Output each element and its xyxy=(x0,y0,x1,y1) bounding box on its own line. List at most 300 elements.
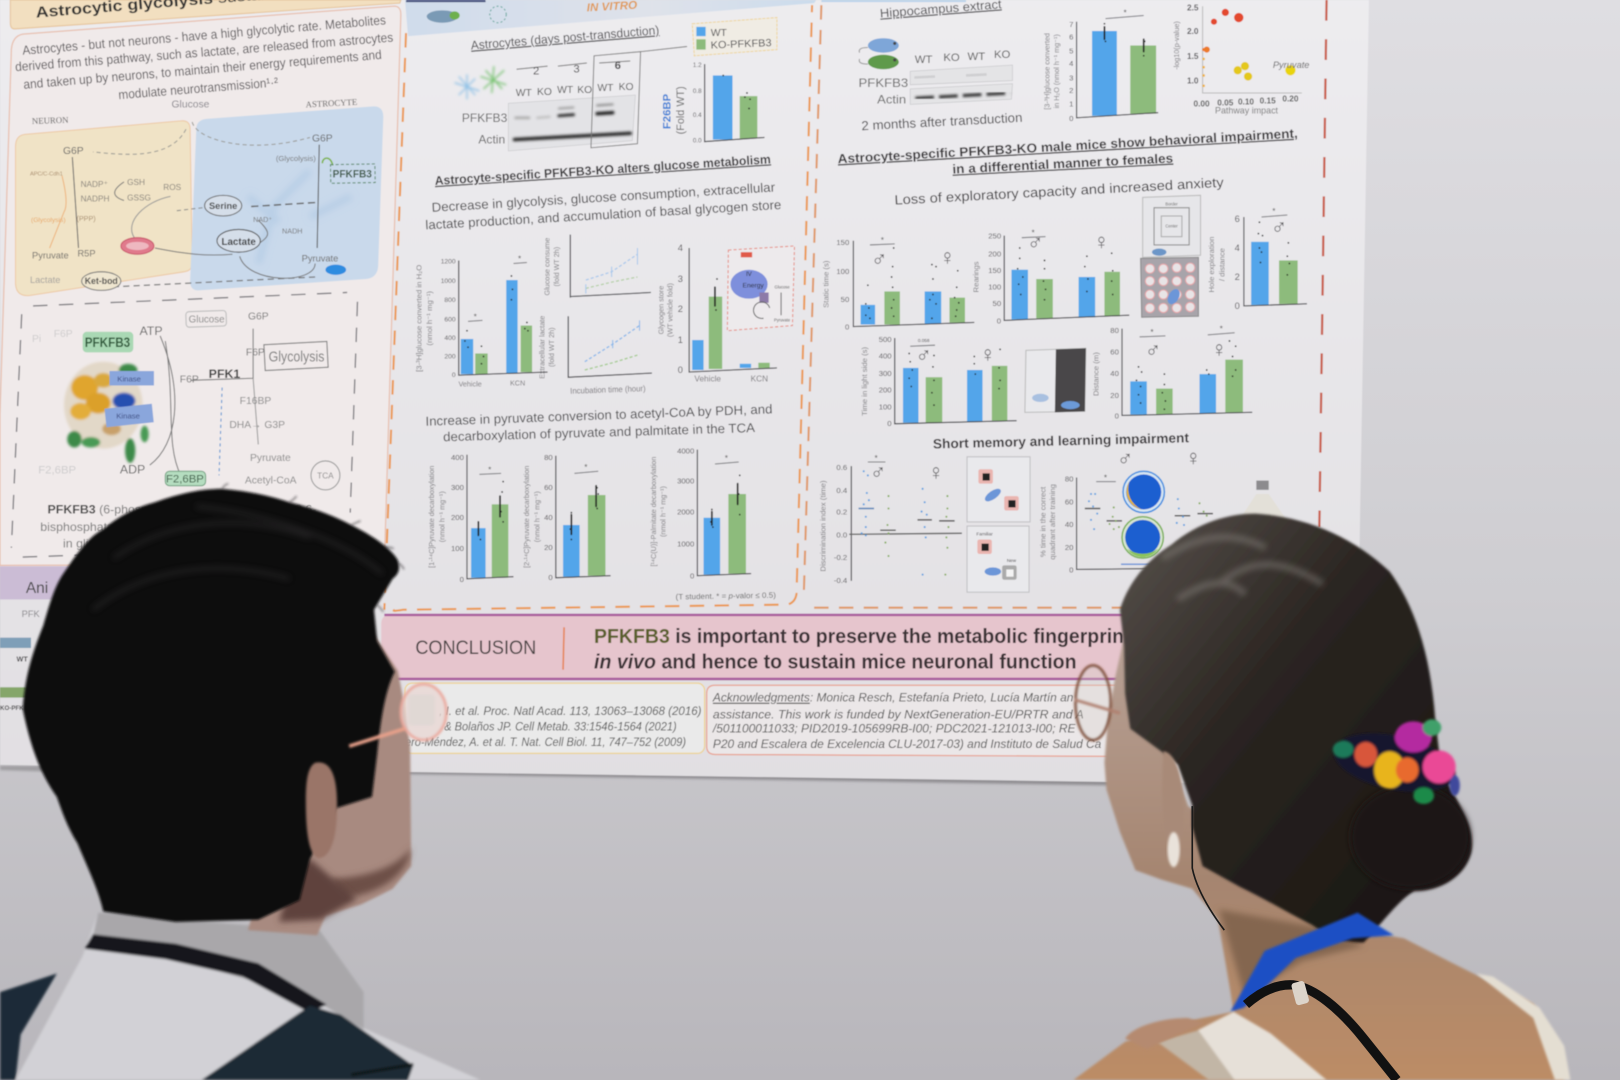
chart: glucose converted: 600 xyxy=(444,316,456,323)
chart: glucose converted: KCN xyxy=(510,378,525,387)
glycolysis pathway: DHA→ G3P xyxy=(229,420,285,431)
western blot: WT xyxy=(557,85,574,96)
references box xyxy=(405,683,705,753)
chart: glucose converted: * xyxy=(518,254,522,263)
chart: discrimination index: ♀ xyxy=(928,460,944,485)
chart: time in light side: 400 xyxy=(879,352,892,361)
chart: pathway scatter: 0.15 xyxy=(1260,96,1276,105)
chart: rearings: ♀ xyxy=(1093,229,1109,254)
acknowledgments box: /501100011033; PID2019-105699RB-I00; PDC2021-121013-I00; RE xyxy=(712,722,1077,736)
chart: hippocampal glucose: 1 xyxy=(1069,99,1073,108)
chart: discrimination index: -0.2 xyxy=(834,553,847,562)
intro text: Astrocytes - but not neurons - have a high glycolytic rate. Metabolites xyxy=(22,12,386,58)
heading band xyxy=(10,0,401,29)
glycolysis pathway: Pi xyxy=(32,334,41,345)
metabolic map: G6P xyxy=(312,134,333,145)
chart: hippocampal glucose: [3-³H]glucose converted xyxy=(1043,33,1052,110)
legend: WT xyxy=(711,28,728,39)
hand xyxy=(1125,1018,1204,1049)
chart: discrimination index: 0.2 xyxy=(836,508,847,517)
chart: glycogen store: (WT vehicle fold) xyxy=(666,283,675,337)
ear xyxy=(306,762,337,858)
chart: rearings: 250 xyxy=(988,232,1001,241)
chart: palmitate: * xyxy=(725,454,729,463)
western blot: KO xyxy=(537,87,552,98)
chart: time in quadrant: 40 xyxy=(1065,520,1073,529)
chart: rearings: 150 xyxy=(988,266,1001,275)
chart: palmitate: 3000 xyxy=(677,477,694,486)
chart: glucose converted: 800 xyxy=(444,297,456,304)
PFKFB3 caption: in glia xyxy=(63,537,95,551)
metabolic map xyxy=(30,122,338,287)
conclusion banner xyxy=(381,614,1136,679)
PFKFB3 caption: PFKFB3 (6-phosphofructo-2-kinase/fructose-2,6- xyxy=(48,503,316,517)
chart: hippocampal glucose: 4 xyxy=(1069,59,1074,68)
chart: hippocampal glucose: 5 xyxy=(1069,47,1073,56)
chart: hole exploration: 4 xyxy=(1235,243,1240,253)
chart: F26BP: 0.8 xyxy=(693,88,702,95)
chart: glycogen store: Vehicle xyxy=(694,374,721,383)
icon: mice xyxy=(859,38,899,69)
panel: animal model (left edge): WT xyxy=(17,654,28,663)
chart: 1-14C pyruvate xyxy=(427,453,513,584)
glasses xyxy=(1074,666,1120,740)
chart: static time xyxy=(822,236,974,332)
metabolic map: (Glycolysis) xyxy=(31,217,66,224)
chart: static time: ♂ xyxy=(871,247,887,272)
chart: glucose converted: 200 xyxy=(444,354,456,361)
chart: F26BP: F26BP xyxy=(662,93,674,129)
chart: hole exploration: Hole exploration xyxy=(1207,237,1216,293)
hair xyxy=(23,489,399,922)
chart: glycogen store: Glycogen store xyxy=(656,286,665,334)
subheading: exploratory capacity: Loss of exploratory capacity and increased anxiety xyxy=(894,175,1224,208)
chart: time in light side: 300 xyxy=(879,369,892,378)
chart: discrimination index: 0.4 xyxy=(836,486,848,495)
subheading: pyruvate: Increase in pyruvate conversion to acetyl-CoA by PDH, and xyxy=(425,401,773,429)
western blot: WT xyxy=(915,54,933,66)
chart: 2-14C pyruvate: 20 xyxy=(544,543,553,552)
metabolic map: NADH xyxy=(282,227,303,236)
chart: time in quadrant: quadrant after training xyxy=(1048,484,1057,560)
chart: pathway scatter: 0.10 xyxy=(1238,97,1254,106)
chart: static time: 50 xyxy=(841,295,849,304)
chart: glucose consume: (fold WT 2h) xyxy=(552,247,561,286)
chart: glucose converted: Vehicle xyxy=(458,380,482,389)
chart: time in light side: ♂ xyxy=(916,343,932,368)
chart: extracellular lactate: (fold WT 2h) xyxy=(547,327,556,367)
chart: rearings: 200 xyxy=(988,249,1001,258)
hair highlights xyxy=(93,506,382,610)
chart: distance: ♀ xyxy=(1211,337,1227,362)
chart: hole exploration: / distance xyxy=(1217,248,1226,281)
chart: time in quadrant xyxy=(1039,445,1213,575)
chart: rearings xyxy=(971,229,1129,325)
heading: behavioral impairment: Astrocyte-specific PFKFB3-KO male mice show behavioral impairment, xyxy=(837,126,1298,166)
chart: time in light side: 100 xyxy=(879,402,892,411)
chart: glucose consume xyxy=(543,235,651,298)
blue oval xyxy=(325,265,346,275)
chart: static time: 150 xyxy=(836,238,849,247)
chart: F26BP: 0.0 xyxy=(693,138,702,145)
chart: hippocampal glucose: 7 xyxy=(1069,20,1073,29)
metabolic map: ROS xyxy=(163,183,182,192)
glycolysis pathway: Pyruvate xyxy=(250,453,291,464)
heading: behavioral impairment: in a differential manner to females xyxy=(952,150,1174,177)
chart: time in quadrant: ♀ xyxy=(1185,445,1201,470)
in vitro banner: IN VITRO xyxy=(586,0,638,14)
glycolysis pathway: F6P xyxy=(180,374,199,385)
top xyxy=(1157,974,1570,1080)
chart: distance: 0 xyxy=(1115,412,1119,421)
metabolic map: R5P xyxy=(77,248,96,258)
metabolic map: NADP⁺ xyxy=(81,180,108,189)
hole board image xyxy=(1141,257,1198,317)
chart: palmitate xyxy=(649,447,751,581)
poster sheet xyxy=(0,0,1369,785)
intro text xyxy=(15,12,394,102)
protein structure: Kinase xyxy=(116,412,140,421)
chart: hole exploration: 0 xyxy=(1235,301,1240,311)
acknowledgments box xyxy=(707,685,1136,757)
glycolysis pathway: G6P xyxy=(248,311,269,322)
chart: palmitate: [¹⁴C(U)]-Palmitate decarboxylation xyxy=(649,457,658,567)
glycolysis pathway: TCA xyxy=(317,472,334,481)
western blot: KO xyxy=(619,82,634,93)
chart: time in light side: Time in light side (s) xyxy=(860,346,869,416)
western blot xyxy=(859,49,1023,133)
chart: glucose converted: 400 xyxy=(444,335,456,342)
black strap xyxy=(1246,985,1397,1080)
chart: glycogen store xyxy=(656,243,777,383)
protein structure xyxy=(64,362,154,463)
conclusion label: CONCLUSION xyxy=(415,637,536,659)
chart: time in light side: 200 xyxy=(879,386,892,395)
chart: hippocampal glucose: 0 xyxy=(1069,114,1073,123)
glycolysis pathway xyxy=(32,311,340,490)
chart: pathway scatter: Pathway impact xyxy=(1215,106,1279,116)
chart: 1-14C pyruvate: * xyxy=(488,465,492,474)
chart: 1-14C pyruvate: 400 xyxy=(451,453,464,462)
PFKFB3 caption xyxy=(40,503,316,551)
chart: discrimination index: ♂ xyxy=(870,460,886,485)
chart: 1-14C pyruvate: 200 xyxy=(451,513,464,522)
conclusion text: PFKFB3 is important to preserve the metabolic fingerprin xyxy=(594,626,1124,648)
glycolysis pathway: F6P xyxy=(54,329,73,340)
chart: pathway scatter: 1.0 xyxy=(1187,77,1199,86)
subheading: pyruvate xyxy=(425,401,773,444)
light dark box image xyxy=(1025,348,1086,412)
chart: discrimination index: * xyxy=(875,454,879,463)
chart: F26BP: 0.4 xyxy=(693,112,702,119)
chart: rearings: 100 xyxy=(988,282,1001,291)
hair shine xyxy=(1162,537,1322,599)
dashed frame xyxy=(384,5,812,611)
chart: 1-14C pyruvate: (nmol h⁻¹ mg⁻¹) xyxy=(437,491,446,542)
chart: discrimination index: Discrimination index (time) xyxy=(818,480,827,572)
chart: pathway scatter: Pyruvate xyxy=(1273,60,1309,70)
chart: palmitate: 2000 xyxy=(677,508,694,517)
chart: palmitate: 4000 xyxy=(677,447,694,456)
lactate node xyxy=(217,229,260,252)
chart: distance: 20 xyxy=(1110,391,1119,400)
western blot: KO xyxy=(577,85,592,96)
chart: 2-14C pyruvate xyxy=(522,453,611,582)
chart: palmitate: 0 xyxy=(690,572,694,581)
chart: time in quadrant: 20 xyxy=(1065,543,1073,552)
lanyard xyxy=(1230,913,1394,1012)
chart: glucose converted xyxy=(415,254,548,389)
metabolic map: GSSG xyxy=(127,193,151,202)
glucose box xyxy=(186,310,227,327)
earring xyxy=(1167,832,1180,867)
chart: 1-14C pyruvate: 300 xyxy=(451,483,464,492)
chart: time in quadrant: 60 xyxy=(1065,497,1073,506)
western blot: 2 months after transduction xyxy=(861,110,1023,133)
chart: extracellular lactate: Extracellular lactate xyxy=(537,316,546,379)
open field image: Border xyxy=(1165,202,1178,207)
open field image: Center xyxy=(1165,223,1178,228)
glycolysis pathway: F2,6BP xyxy=(38,464,76,476)
metabolic map: APC/C-Cdh1 xyxy=(30,172,63,178)
chart: rearings: * xyxy=(1032,229,1036,238)
glycolysis pathway: F6P xyxy=(246,348,265,359)
glycolysis box: Glycolysis xyxy=(269,350,324,366)
chart: F26BP: (Fold WT) xyxy=(675,86,687,134)
PFKFB3 caption: bisphosphatase-3) xyxy=(40,520,142,534)
chart: static time: Static time (s) xyxy=(822,260,831,308)
object recognition images: Familiar xyxy=(976,531,993,536)
western blot: KO xyxy=(943,52,960,64)
chart: glucose converted: * xyxy=(474,312,478,321)
astrocyte process shading xyxy=(248,171,351,264)
chart: distance: 40 xyxy=(1110,369,1119,378)
chart: time in quadrant: 0 xyxy=(1069,566,1073,575)
hair xyxy=(1120,514,1472,943)
chart: 2-14C pyruvate: 60 xyxy=(544,483,553,492)
chart: distance: * xyxy=(1150,328,1154,337)
strap clip xyxy=(1291,980,1310,1006)
chart: glucose converted: (nmol h⁻¹ mg⁻¹) xyxy=(425,291,434,346)
chart: glycogen store: 0 xyxy=(678,365,683,375)
glycolysis pathway: Acetyl-CoA xyxy=(245,476,297,487)
PFKFB3 dashed box xyxy=(330,164,375,183)
neuron cell xyxy=(15,121,192,296)
western blot: PFKFB3 xyxy=(462,111,507,125)
glucose box: Glucose xyxy=(189,314,225,325)
astrocyte cell xyxy=(190,106,383,290)
ketone node: Ket-bod xyxy=(85,276,118,286)
chart: distance: 60 xyxy=(1110,347,1119,356)
glycolysis box xyxy=(264,341,328,371)
object recognition images xyxy=(967,457,1030,592)
chart: 2-14C pyruvate: [2-¹⁴C]Pyruvate decarboxylation xyxy=(522,466,531,568)
cell labels: Glucose xyxy=(172,99,210,110)
callout: mitochondrial energy inset: Glucose xyxy=(775,284,790,289)
serine node: Serine xyxy=(209,201,237,211)
chart: glycogen store: KCN xyxy=(751,374,768,383)
callout: mitochondrial energy inset: Energy xyxy=(743,282,764,289)
ketone node xyxy=(82,272,121,290)
panel: animal model (left edge): Ani xyxy=(26,580,48,597)
chart: hole exploration xyxy=(1207,207,1307,311)
skin: face neck shoulders xyxy=(1073,632,1564,1080)
poster xyxy=(0,0,1369,785)
chart: glucose consume: Glucose consume xyxy=(543,238,552,296)
chart: hole exploration: ♂ xyxy=(1271,215,1287,240)
chart: 2-14C pyruvate: 80 xyxy=(544,453,553,462)
glycolysis pathway: ATP xyxy=(139,324,163,338)
chart: distance: ♂ xyxy=(1145,338,1161,363)
chart: time in light side xyxy=(860,335,1017,428)
panel: astrocytic glycolysis xyxy=(0,0,401,565)
legend: KO-PFKFB3 xyxy=(710,38,772,52)
metabolic map: G6P xyxy=(63,146,84,157)
chart: pathway scatter: 0.20 xyxy=(1282,94,1299,103)
subheading: glycolysis: lactate production, and accumulation of basal glycogen store xyxy=(425,197,782,232)
chart: glycogen store: 2 xyxy=(678,304,683,314)
chart: distance: 80 xyxy=(1110,326,1119,335)
western blot xyxy=(462,47,687,151)
western blot: 2 xyxy=(533,65,539,77)
person: woman viewed from behind xyxy=(1073,514,1570,1080)
chart: extracellular lactate xyxy=(537,316,652,396)
conclusion text xyxy=(594,626,1124,674)
intro text: modulate neurotransmission¹·² xyxy=(118,74,279,102)
chart: time in light side: 0 xyxy=(887,419,892,428)
dashed frame xyxy=(804,5,1126,608)
heading: glucose metabolism: Astrocyte-specific PFKFB3-KO alters glucose metabolism xyxy=(434,152,771,188)
PFKFB3 dashed box: PFKFB3 xyxy=(333,169,372,181)
glasses xyxy=(349,684,446,746)
neck and face xyxy=(248,610,411,935)
chart: pathway scatter: 2.0 xyxy=(1187,27,1199,36)
acknowledgments box: P20 and Escalera de Excelencia CLU-2017-03) and Instituto de Salud Ca xyxy=(713,737,1102,751)
scrunchie xyxy=(1329,719,1461,804)
chart: 1-14C pyruvate: 0 xyxy=(460,575,464,584)
icon: camera xyxy=(1235,481,1291,527)
panel: animal model (left edge): KO-PFK xyxy=(0,705,24,712)
western blot: 3 xyxy=(573,63,580,75)
subheading: glycolysis xyxy=(425,179,782,232)
cell labels xyxy=(32,97,357,126)
mitochondrion xyxy=(121,238,154,254)
callout: mitochondrial energy inset: Pyruvate xyxy=(774,317,791,322)
chart: pathway scatter: 0.00 xyxy=(1194,99,1210,108)
chart: discrimination index: 0.6 xyxy=(836,463,847,472)
western blot: Actin xyxy=(478,133,505,147)
chart: distance xyxy=(1091,325,1252,421)
panel background xyxy=(0,6,401,565)
hair bun xyxy=(1350,785,1470,889)
chart: distance: Distance (m) xyxy=(1091,352,1100,396)
panel: in vitro xyxy=(384,0,816,611)
frizzy hair edge xyxy=(222,484,404,612)
chart: time in quadrant: ♂ xyxy=(1117,446,1133,471)
chart: hippocampal glucose: 6 xyxy=(1069,32,1073,41)
metabolic map: Pyruvate xyxy=(302,253,338,263)
western blot: WT xyxy=(968,51,985,63)
in vitro banner xyxy=(405,0,816,36)
PFKFB3 label xyxy=(83,332,133,352)
western blot: WT xyxy=(516,88,533,99)
panel: in vivo xyxy=(804,0,1327,608)
chart: rearings: ♂ xyxy=(1027,230,1043,255)
water maze heatmaps xyxy=(1121,471,1164,564)
open field image xyxy=(1143,195,1201,257)
chart: glucose converted: 1000 xyxy=(441,278,456,285)
western blot: KO xyxy=(994,49,1011,61)
protein structure: Kinase xyxy=(117,374,141,383)
chart: hippocampal glucose: * xyxy=(1124,9,1128,18)
serine node xyxy=(205,195,242,216)
metabolic map: (PPP) xyxy=(76,214,96,223)
references box: & Bolaños JP. Cell Metab. 33:1546-1564 (2021) xyxy=(444,720,677,734)
chart: discrimination index xyxy=(818,454,962,585)
chart: hole exploration: 2 xyxy=(1235,272,1240,282)
chart: glycogen store: 3 xyxy=(678,274,683,284)
chart: glucose converted: [3-³H]glucose converted in H₂O xyxy=(415,265,424,372)
chart: rearings: Rearings xyxy=(971,261,980,292)
chart: glucose converted: 1200 xyxy=(441,259,456,266)
chart: hole exploration: * xyxy=(1272,207,1276,216)
conclusion text: in vivo and hence to sustain mice neuronal function xyxy=(594,652,1077,674)
callout: mitochondrial energy inset: IV xyxy=(746,271,753,278)
glycolysis pathway: F16BP xyxy=(240,396,271,407)
subheading: short memory: Short memory and learning impairment xyxy=(933,430,1190,452)
chart: static time: * xyxy=(881,236,885,245)
cell labels: ASTROCYTE xyxy=(305,97,357,109)
chart: pathway scatter xyxy=(1172,3,1309,116)
chart: palmitate: 1000 xyxy=(677,540,694,549)
western blot: Actin xyxy=(877,92,906,106)
western blot: 6 xyxy=(615,60,621,72)
western blot: PFKFB3 xyxy=(859,76,908,90)
chart: hippocampal glucose: in H₂O (nmol h⁻¹ mg⁻¹) xyxy=(1052,34,1061,108)
chart: 2-14C pyruvate: * xyxy=(584,463,588,472)
chart: 2-14C pyruvate: 40 xyxy=(544,513,553,522)
cell labels: NEURON xyxy=(32,115,69,126)
footnote: statistics: (T student. * = p-valor ≤ 0.5) xyxy=(676,591,776,601)
chart: pathway scatter: 2.5 xyxy=(1187,3,1199,12)
panel: animal model (left edge): PFK xyxy=(22,609,41,619)
chart: distance: * xyxy=(1220,325,1224,334)
chart: 1-14C pyruvate: 100 xyxy=(451,544,464,553)
intro text: and taken up by neurons, to maintain their energy requirements and xyxy=(23,47,382,92)
object recognition images: New xyxy=(1007,558,1017,563)
chart: time in light side: 0.058 xyxy=(918,338,930,343)
chart: static time: 0 xyxy=(845,323,849,332)
chart: pathway scatter: -log10(p-value) xyxy=(1172,21,1181,70)
shirt and vest xyxy=(0,913,480,1080)
metabolic map: GSH xyxy=(127,178,145,187)
acknowledgments box: assistance. This work is funded by NextGeneration-EU/PRTR and A xyxy=(713,707,1084,721)
references box: ero-Méndez, A. et al. T. Nat. Cell Biol. 11, 747–752 (2009) xyxy=(405,735,686,749)
chart: pathway scatter: 0.05 xyxy=(1217,98,1234,107)
ear xyxy=(1162,751,1184,843)
chart: extracellular lactate: Incubation time (hour) xyxy=(570,384,646,396)
metabolic map: NAD⁺ xyxy=(253,215,272,224)
chart: pathway scatter: 1.5 xyxy=(1187,52,1199,61)
acknowledgments box: Acknowledgments: Monica Resch, Estefanía Prieto, Lucía Martín an xyxy=(712,691,1074,705)
western blot: WT xyxy=(597,83,614,94)
metabolic map: Lactate xyxy=(30,275,60,285)
western title: Astrocytes (days post-transduction) xyxy=(470,23,660,53)
chart: static time: ♀ xyxy=(939,245,956,270)
metabolic map: NADPH xyxy=(81,195,110,204)
chart: rearings: 0 xyxy=(997,316,1001,325)
PFKFB3 label: PFKFB3 xyxy=(85,335,130,350)
